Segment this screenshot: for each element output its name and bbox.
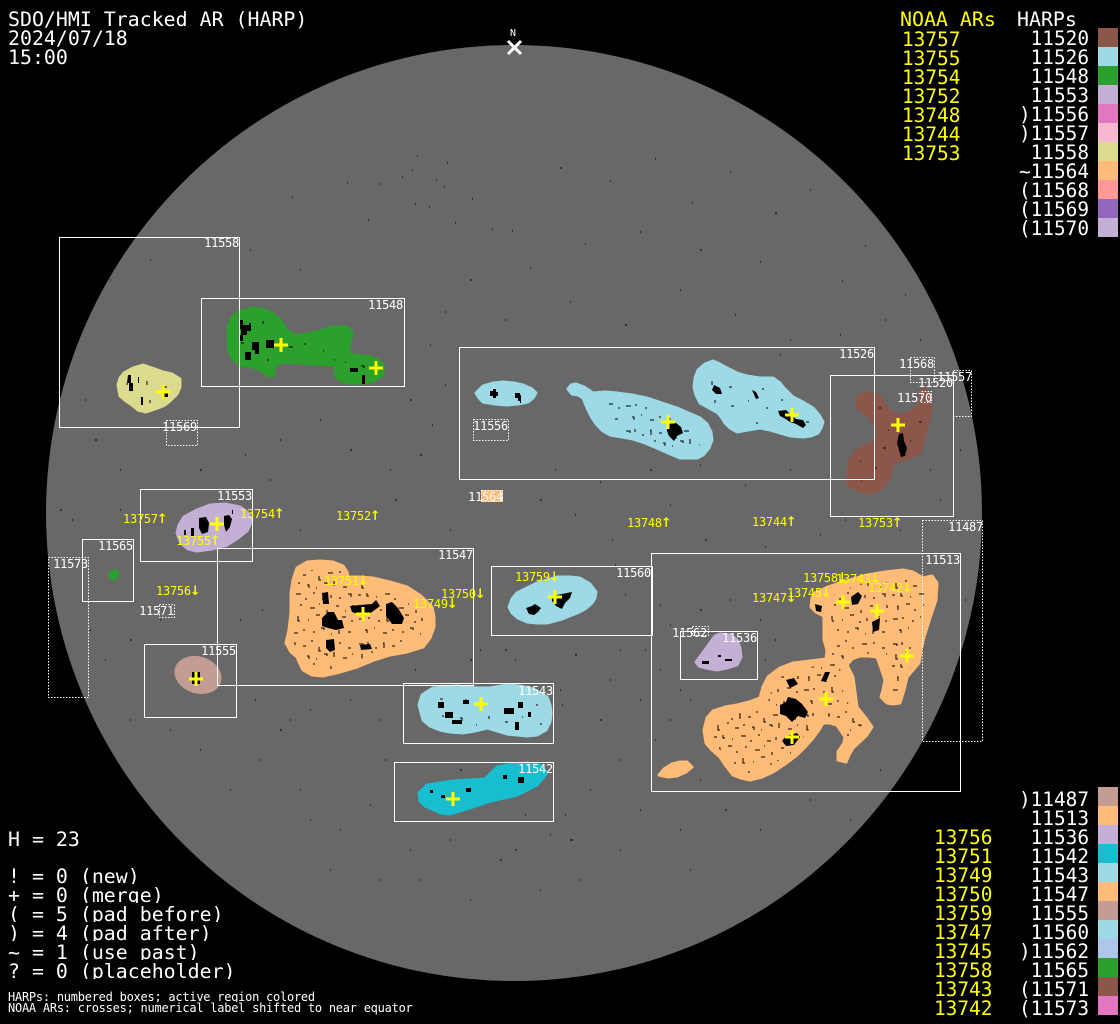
top table NOAA numbers: 13754	[902, 66, 960, 89]
summary counts: ! = 0 (new)	[8, 865, 140, 888]
HARP box labels: 11573	[53, 557, 88, 571]
bottom table NOAA numbers: 13745	[934, 940, 992, 963]
region 11555	[169, 650, 227, 700]
region 11543	[419, 685, 551, 736]
top table HARP numbers: 11520	[1031, 27, 1089, 50]
NOAA AR labels shifted to equator: 13749↓	[413, 592, 458, 613]
region 11548	[228, 308, 383, 384]
region 11542	[419, 763, 547, 814]
bottom table NOAA numbers	[934, 826, 992, 1020]
region 11565	[108, 569, 119, 581]
HARP box labels: 11565	[98, 539, 133, 553]
top table NOAA numbers	[902, 28, 960, 165]
bottom table NOAA numbers: 13747	[934, 921, 992, 944]
top table HARP numbers: (11568	[1019, 179, 1089, 202]
bottom table NOAA numbers: 13756	[934, 826, 992, 849]
HARP box labels: 11548	[368, 298, 403, 312]
bottom table HARP numbers: 11536	[1031, 826, 1089, 849]
HARP box labels: 11557	[937, 370, 972, 384]
top table HARP numbers: )11556	[1019, 103, 1089, 126]
title: SDO/HMI Tracked AR (HARP)	[8, 8, 307, 31]
top table HARP numbers: 11558	[1031, 141, 1089, 164]
NOAA AR labels shifted to equator	[123, 502, 913, 613]
bottom table HARP numbers: 11565	[1031, 959, 1089, 982]
bottom table NOAA numbers: 13759	[934, 902, 992, 925]
top table header: NOAA ARs	[900, 8, 996, 31]
HARP box labels: 11571	[139, 604, 174, 618]
bottom table HARP numbers: (11573	[1019, 997, 1089, 1020]
summary counts: ? = 0 (placeholder)	[8, 960, 236, 983]
summary counts: ) = 4 (pad after)	[8, 922, 212, 945]
bottom table colour swatches	[1098, 787, 1118, 1015]
top table HARP numbers: ~11564	[1019, 160, 1089, 183]
NOAA AR labels shifted to equator: 13756↓	[156, 579, 201, 600]
region 11553	[177, 504, 251, 551]
summary counts: ~ = 1 (use past)	[8, 941, 200, 964]
HARP box labels: 11569	[162, 420, 197, 434]
title	[8, 8, 307, 69]
north pole marker	[508, 28, 521, 54]
HARP box labels: 11520	[918, 376, 953, 390]
bottom table NOAA numbers: 13749	[934, 864, 992, 887]
NOAA AR labels shifted to equator: 13743↓	[836, 567, 881, 588]
summary counts: H = 23	[8, 828, 80, 851]
HARP box labels: 11513	[925, 553, 960, 567]
HARP boxes	[48, 238, 982, 822]
title: 2024/07/18	[8, 27, 128, 50]
NOAA AR labels shifted to equator: 13754↑	[240, 502, 285, 523]
HARP box labels	[53, 236, 983, 776]
HARP box labels: 11526	[839, 347, 874, 361]
top table NOAA numbers: 13748	[902, 104, 960, 127]
HARP box labels: 11562	[672, 626, 707, 640]
NOAA AR labels shifted to equator: 13748↑	[627, 511, 672, 532]
top table NOAA numbers: 13752	[902, 85, 960, 108]
NOAA AR labels shifted to equator: 13752↑	[336, 504, 381, 525]
region 11558	[118, 365, 180, 412]
region 11536	[696, 634, 741, 670]
top table NOAA numbers: 13753	[902, 142, 960, 165]
NOAA AR labels shifted to equator: 13751↓	[324, 569, 369, 590]
region 11526 east blob	[694, 361, 823, 437]
footnote	[0, 990, 413, 1015]
bottom table NOAA numbers: 13751	[934, 845, 992, 868]
HARP box labels: 11547	[438, 548, 473, 562]
NOAA AR labels shifted to equator: 13757↑	[123, 507, 168, 528]
region 11526 central blob	[568, 384, 712, 458]
region 11520	[848, 387, 930, 493]
top table NOAA numbers: 13757	[902, 28, 960, 51]
footnote: HARPs: numbered boxes; active region colored	[8, 990, 315, 1004]
summary counts: ( = 5 (pad before)	[8, 903, 224, 926]
bottom table HARP numbers: 11547	[1031, 883, 1089, 906]
NOAA AR labels shifted to equator: 13744↑	[752, 510, 797, 531]
region 11547	[286, 561, 434, 676]
HARP box labels: 11553	[217, 489, 252, 503]
NOAA AR labels shifted to equator: 13742↓	[868, 576, 913, 597]
bottom table HARP numbers: )11562	[1019, 940, 1089, 963]
summary counts	[0, 828, 240, 983]
NOAA AR labels shifted to equator: 13758↓	[803, 566, 848, 587]
top table HARP numbers: (11569	[1019, 198, 1089, 221]
HARP box labels: 11542	[518, 762, 553, 776]
HARP box labels: 11555	[201, 644, 236, 658]
region 11526 west blob	[476, 382, 536, 405]
top table header: HARPs	[1017, 8, 1077, 31]
bottom table HARP numbers	[1019, 788, 1089, 1020]
bottom table HARP numbers: 11555	[1031, 902, 1089, 925]
bottom table HARP numbers: 11560	[1031, 921, 1089, 944]
region 11560	[509, 577, 596, 623]
bottom table NOAA numbers: 13750	[934, 883, 992, 906]
region 11513 small blob	[659, 762, 692, 777]
NOAA AR labels shifted to equator: 13750↓	[441, 582, 486, 603]
footnote: NOAA ARs: crosses; numerical label shifted to near equator	[8, 1001, 413, 1015]
top table HARP numbers: (11570	[1019, 217, 1089, 240]
top table NOAA numbers: 13755	[902, 47, 960, 70]
HARP box labels: 11543	[518, 684, 553, 698]
HARP box labels: 11560	[616, 566, 651, 580]
bottom table NOAA numbers: 13742	[934, 997, 992, 1020]
NOAA AR labels shifted to equator: 13755↑	[176, 529, 221, 550]
top table HARP numbers: 11526	[1031, 46, 1089, 69]
bottom table HARP numbers: )11487	[1019, 788, 1089, 811]
top table HARP numbers	[1019, 27, 1089, 240]
north pole marker: N	[510, 28, 516, 39]
NOAA AR labels shifted to equator: 13759↓	[515, 565, 560, 586]
top table HARP numbers: 11548	[1031, 65, 1089, 88]
title: 15:00	[8, 46, 68, 69]
NOAA AR labels shifted to equator: 13745↓	[787, 581, 832, 602]
HARP box labels: 11558	[204, 236, 239, 250]
top table header	[900, 8, 1077, 31]
HARP box labels: 11570	[897, 391, 932, 405]
NOAA AR labels shifted to equator: 13753↑	[858, 511, 903, 532]
bottom table HARP numbers: 11542	[1031, 845, 1089, 868]
HARP box labels: 11487	[948, 520, 983, 534]
bottom table NOAA numbers: 13758	[934, 959, 992, 982]
bottom table HARP numbers: 11543	[1031, 864, 1089, 887]
bottom table NOAA numbers: 13743	[934, 978, 992, 1001]
summary counts: + = 0 (merge)	[8, 884, 164, 907]
HARP box labels: 11564	[468, 490, 503, 504]
top table colour swatches	[1098, 28, 1118, 237]
NOAA AR crosses	[156, 338, 914, 806]
bottom table HARP numbers: 11513	[1031, 807, 1089, 830]
NOAA AR labels shifted to equator: 13747↓	[752, 586, 797, 607]
HARP box labels: 11568	[899, 357, 934, 371]
HARP box labels: 11536	[722, 631, 757, 645]
top table HARP numbers: )11557	[1019, 122, 1089, 145]
HARP box labels: 11556	[473, 419, 508, 433]
bottom table HARP numbers: (11571	[1019, 978, 1089, 1001]
top table NOAA numbers: 13744	[902, 123, 960, 146]
top table HARP numbers: 11553	[1031, 84, 1089, 107]
solar disk	[46, 45, 982, 981]
region 11513 main	[704, 570, 937, 780]
